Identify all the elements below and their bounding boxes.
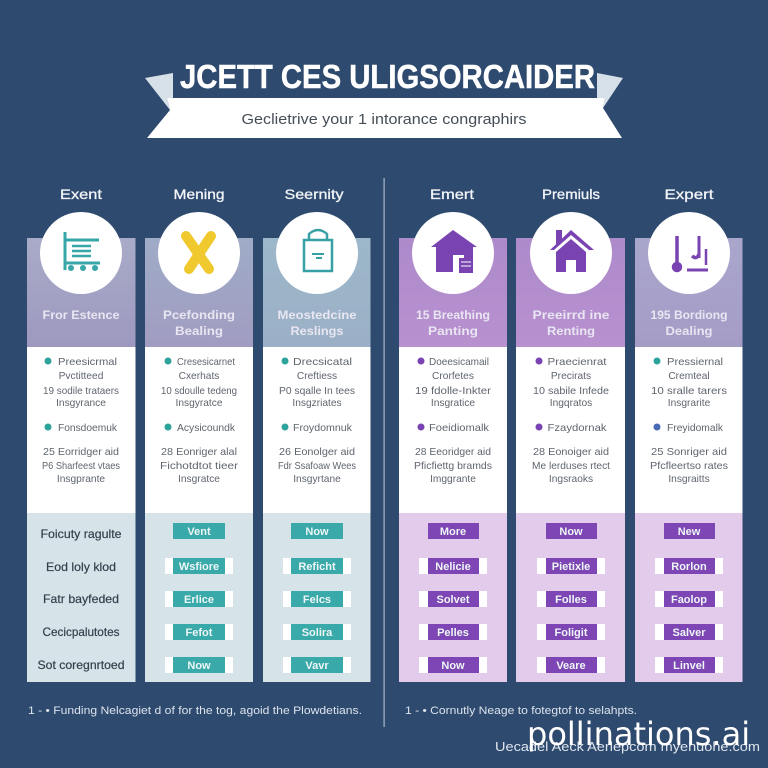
center divider — [384, 178, 385, 727]
column: Exent: Sot coregnrtoed — [38, 658, 124, 672]
column: Seernity: Meostedcine — [278, 308, 357, 322]
watermark: pollinations.ai — [527, 715, 750, 753]
column: Seernity: Vavr — [305, 660, 329, 672]
column: Exent: 19 sodile trataers — [43, 386, 119, 397]
column: Premiuls: Now — [559, 526, 583, 538]
icon: house — [550, 230, 594, 272]
column: Premiuls: Praecienrat — [548, 357, 607, 368]
column: Seernity: Insgzriates — [292, 398, 342, 409]
column: Mening — [145, 186, 253, 682]
icon: cart — [65, 232, 100, 270]
column: Exent: 25 Eorridger aid — [43, 447, 119, 458]
column: Premiuls: Folles — [555, 594, 587, 606]
column: Emert: Pficfiettg bramds — [414, 461, 492, 472]
column: Seernity: Froydomnuk — [293, 423, 353, 434]
column: Exent: Cecicpalutotes — [42, 625, 120, 639]
column: Expert: Faolop — [671, 594, 707, 606]
footnote right: 1 - • Cornutly Neage to fotegtof to selahpts. — [405, 705, 637, 717]
column: Mening: Now — [187, 660, 211, 672]
column: Exent: Preesicrmal — [58, 357, 117, 368]
column: Premiuls — [516, 186, 625, 682]
column: Exent: P6 Sharfeest vtaes — [42, 461, 120, 472]
column: Premiuls: 10 sabile Infede — [533, 386, 609, 397]
column: Seernity: Fdr Ssafoaw Wees — [278, 461, 356, 472]
column: Emert: Insgratice — [431, 398, 475, 409]
column: Mening: Insgratce — [178, 474, 220, 485]
column: Premiuls: Pietixle — [552, 561, 590, 573]
column: Seernity: Now — [305, 526, 329, 538]
title: JCETT CES ULIGSORCAIDER — [180, 58, 595, 95]
column: Emert: Pelles — [437, 627, 469, 639]
column: Expert: Linvel — [673, 660, 705, 672]
column: Mening: Insgyratce — [176, 398, 223, 409]
column: Emert: More — [440, 526, 466, 538]
column: Expert: Cremteal — [668, 371, 710, 382]
column: Emert: Solvet — [436, 594, 470, 606]
column: Emert: Now — [441, 660, 465, 672]
column: Mening: Bealing — [175, 324, 223, 338]
column: Mening: Vent — [187, 526, 211, 538]
column: Mening: Pcefonding — [163, 308, 235, 322]
icon: bag — [304, 230, 332, 271]
column: Expert: Pfcfleertso rates — [650, 461, 728, 472]
column: Seernity: Reficht — [298, 561, 336, 573]
column: Expert: 10 sralle tarers — [651, 386, 727, 397]
column: Exent — [27, 186, 136, 682]
column: Mening: 28 Eonriger alal — [161, 447, 237, 458]
column: Exent: Pvctitteed — [59, 371, 104, 382]
column: Premiuls: 28 Eonoiger aid — [533, 447, 609, 458]
column: Expert: Salver — [672, 627, 706, 639]
column: Premiuls: Renting — [547, 324, 595, 338]
column: Mening: Cresesicarnet — [177, 357, 235, 368]
column: Premiuls: Ingsraoks — [549, 474, 593, 485]
source line: Uecadel Aeck Aerlepcom myehuohe.com — [495, 739, 760, 754]
title banner — [145, 58, 623, 138]
column: Seernity: Felcs — [303, 594, 331, 606]
icon: crossed tools — [186, 236, 211, 269]
column: Seernity: 26 Eonolger aid — [279, 447, 355, 458]
column: Premiuls: Preeirrd ine — [532, 308, 610, 322]
column: Expert: 195 Bordiong — [650, 308, 728, 322]
column: Exent: Insgyrance — [56, 398, 106, 409]
column: Seernity — [263, 186, 370, 682]
column: Mening: Fichotdtot tieer — [160, 461, 239, 472]
subtitle: Geclietrive your 1 intorance congraphirs — [242, 112, 526, 128]
column: Exent: Fror Estence — [42, 308, 120, 322]
column: Premiuls: Veare — [556, 660, 586, 672]
column: Expert: Pressiernal — [667, 357, 723, 368]
column: Exent: Exent — [60, 186, 102, 202]
icon: tools — [674, 236, 708, 270]
column: Seernity: Drecsicatal — [293, 357, 352, 368]
column: Mening: 10 sdoulle tedeng — [161, 386, 237, 397]
column: Emert: Crorfetes — [432, 371, 474, 382]
column: Expert: Freyidomalk — [667, 423, 724, 434]
column: Emert: Panting — [428, 324, 478, 338]
column: Expert: Insgrarite — [668, 398, 711, 409]
column: Exent: Fatr bayfeded — [43, 592, 119, 606]
icon: house with ledger — [431, 230, 477, 273]
column: Expert: New — [678, 526, 701, 538]
column: Mening: Wsfiore — [179, 561, 219, 573]
column: Mening: Cxerhats — [179, 371, 219, 382]
column: Emert: Nelicie — [435, 561, 471, 573]
column: Emert: Emert — [430, 186, 474, 202]
column: Emert — [399, 186, 507, 682]
column: Emert: 15 Breathing — [416, 308, 490, 322]
column: Expert: Rorlon — [671, 561, 707, 573]
column: Mening: Erlice — [184, 594, 214, 606]
column: Emert: Doeesicamail — [429, 357, 489, 368]
column: Emert: Foeidiomalk — [429, 423, 490, 434]
column: Seernity: Insgyrtane — [293, 474, 341, 485]
column: Premiuls: Me lerduses rtect — [532, 461, 610, 472]
column: Premiuls: Foligit — [554, 627, 588, 639]
column: Premiuls: Premiuls — [542, 186, 600, 202]
column: Seernity: P0 sqalle In tees — [279, 386, 355, 397]
column: Mening: Mening — [174, 186, 224, 202]
column: Emert: 28 Eeoridger aid — [415, 447, 491, 458]
footnote left: 1 - • Funding Nelcagiet d of for the tog, agoid the Plowdetians. — [28, 705, 362, 717]
column: Exent: Foicuty ragulte — [40, 527, 122, 541]
column: Expert: Expert — [664, 186, 714, 202]
column: Expert: Dealing — [666, 324, 712, 338]
column: Expert — [635, 186, 742, 682]
column: Seernity: Seernity — [284, 186, 344, 202]
column: Premiuls: Precirats — [551, 371, 591, 382]
column: Expert: Insgraitts — [668, 474, 710, 485]
column: Seernity: Reslings — [290, 324, 344, 338]
column: Expert: 25 Sonriger aid — [651, 447, 727, 458]
column: Seernity: Creftiess — [297, 371, 337, 382]
column: Mening: Fefot — [186, 627, 213, 639]
column: Seernity: Solira — [302, 627, 333, 639]
column: Emert: 19 fdolle-Inkter — [415, 386, 492, 397]
column: Exent: Insgprante — [57, 474, 105, 485]
column: Exent: Fonsdoemuk — [58, 423, 118, 434]
column: Emert: Imggrante — [430, 474, 476, 485]
column: Premiuls: Ingqratos — [550, 398, 592, 409]
column: Premiuls: Fzaydornak — [548, 423, 607, 434]
column: Exent: Eod loly klod — [46, 560, 116, 574]
column: Mening: Acysicoundk — [177, 423, 236, 434]
